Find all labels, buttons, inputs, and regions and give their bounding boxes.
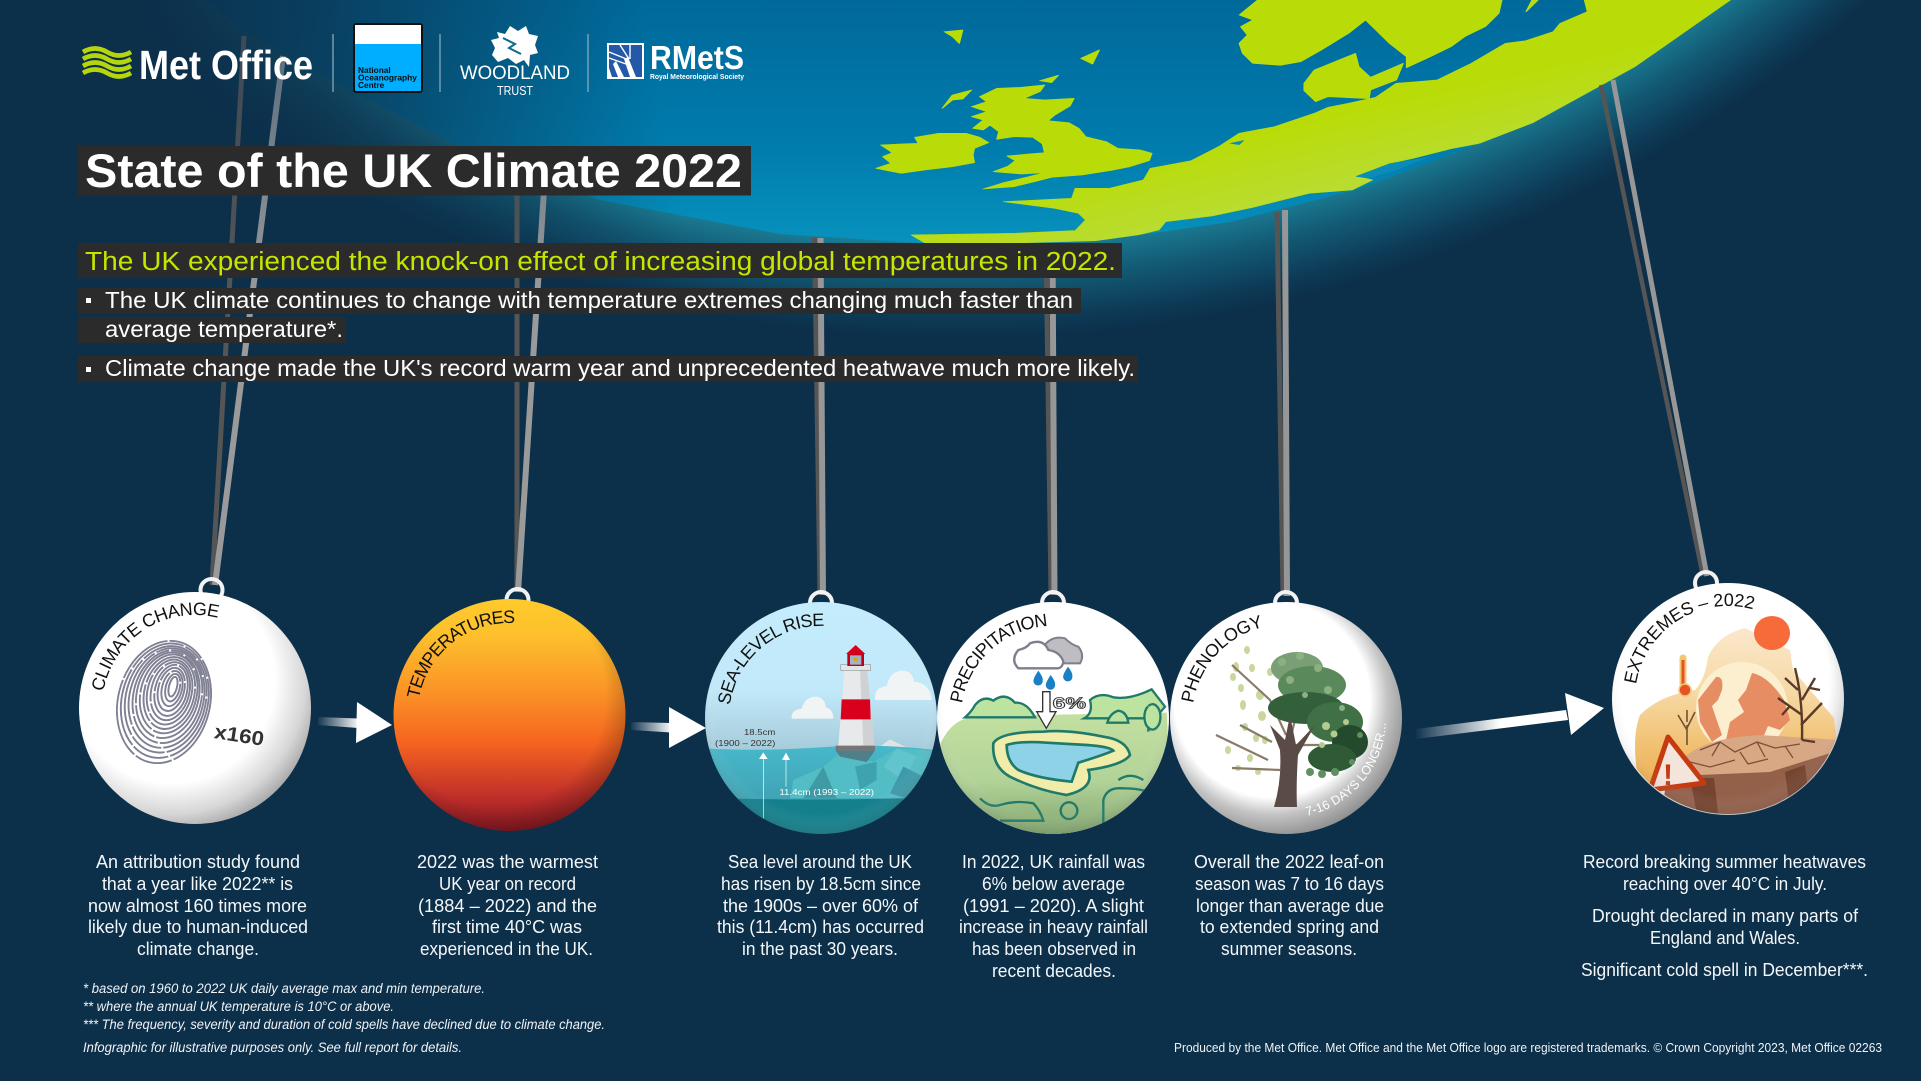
National Oceanography Centre logo: Centre (358, 80, 385, 90)
down arrow (1037, 692, 1056, 728)
distant peak (880, 740, 908, 748)
sun (1754, 616, 1790, 650)
deep water (738, 798, 904, 834)
text: extremes: Drought declared in many parts of (1592, 906, 1859, 926)
arrow: phenology to extremes (1416, 693, 1604, 739)
footnotes: ** where the annual UK temperature is 10°C or above. (83, 999, 394, 1014)
text: temperatures: (1884 – 2022) and the (418, 896, 597, 916)
bauble: extremes: ! (1663, 759, 1673, 792)
Met Office logo (83, 42, 313, 88)
icon: tree (1216, 646, 1368, 807)
National Oceanography Centre logo: National (358, 65, 391, 75)
lighthouse (836, 645, 875, 762)
icon: fingerprint (116, 640, 212, 764)
curved heading: PRECIPITATION (950, 614, 1046, 702)
Woodland Trust logo: TRUST (497, 84, 533, 98)
text: extremes (1581, 852, 1868, 980)
text: precipitation: 6% below average (982, 874, 1125, 894)
6% label: 6% (1053, 695, 1087, 712)
bullet: temperature extremes: The UK climate continues to change with temperature extremes changing much faster than (105, 287, 1073, 313)
curved label: days longer: 7-16 DAYS LONGER... (1305, 724, 1386, 816)
arrow: climate change to temperatures (318, 702, 392, 743)
title: State of the UK Climate 2022 (85, 145, 742, 198)
bauble: phenology (1170, 590, 1402, 834)
text: sea level: this (11.4cm) has occurred (717, 917, 924, 937)
ocean (195, 0, 1740, 245)
cliff (1664, 753, 1830, 814)
Woodland Trust logo: WOODLAND (460, 63, 570, 84)
text: climate change: now almost 160 times more (88, 896, 307, 916)
credit line: Produced by the Met Office. Met Office and the Met Office logo are registered trademarks. © Crown Copyright 2023, Met Office 02263 (1174, 1041, 1882, 1055)
National Oceanography Centre logo: Oceanography (358, 72, 417, 82)
text: climate change: climate change. (137, 939, 259, 959)
18.5cm label: 18.5cm (744, 727, 775, 737)
green landscape (940, 712, 1168, 834)
text: precipitation (959, 852, 1148, 981)
bullet: record warm year: Climate change made the UK's record warm year and unprecedented heatwave much more likely. (105, 355, 1135, 381)
text: temperatures: 2022 was the warmest (417, 852, 598, 872)
divider (439, 34, 441, 92)
sea (703, 746, 940, 800)
bushes (965, 689, 1165, 732)
x160 label: x160 (213, 721, 266, 751)
text: precipitation: has been observed in (972, 939, 1136, 959)
text: extremes: England and Wales. (1650, 928, 1800, 948)
sea-level arrows (759, 752, 790, 818)
divider (587, 34, 589, 92)
text: sea level (717, 852, 924, 959)
text: extremes: reaching over 40°C in July. (1623, 874, 1827, 894)
trunk (1270, 715, 1315, 807)
1900-2022 label: (1900 – 2022) (715, 738, 775, 748)
text: climate change: An attribution study found (96, 852, 300, 872)
bauble: temperatures (394, 587, 626, 831)
RMetS logo: RMetS (650, 39, 744, 76)
text: phenology: to extended spring and (1200, 917, 1379, 937)
text: phenology: season was 7 to 16 days (1195, 874, 1384, 894)
text: temperatures: first time 40°C was (432, 917, 582, 937)
curved heading: EXTREMES – 2022 (1624, 593, 1754, 683)
white cloud (1014, 642, 1063, 668)
text: sea level: in the past 30 years. (742, 939, 898, 959)
curved heading: PHENOLOGY (1181, 615, 1260, 702)
pale leaves (1225, 646, 1273, 775)
footnotes: Infographic for illustrative purposes only. See full report for details. (83, 1040, 462, 1055)
foliage (1268, 652, 1368, 778)
RMetS logo (607, 39, 745, 81)
small bare tree (1678, 710, 1695, 745)
Met Office logo: Met Office (139, 42, 313, 88)
RMetS logo: Royal Meteorological Society (650, 72, 745, 81)
text: phenology: summer seasons. (1221, 939, 1357, 959)
text: sea level: Sea level around the UK (728, 852, 912, 872)
text: temperatures: UK year on record (439, 874, 576, 894)
National Oceanography Centre logo (354, 24, 422, 92)
curved heading: CLIMATE CHANGE (92, 602, 220, 690)
arrow: temperatures to sea level (631, 707, 706, 748)
lake (993, 731, 1130, 795)
text: phenology (1194, 852, 1384, 959)
low-poly rocks (790, 748, 932, 798)
bauble: sea-level rise (705, 590, 937, 834)
bare tree (1778, 668, 1822, 742)
text: temperatures (417, 852, 598, 959)
footnotes: *** The frequency, severity and duration of cold spells have declined due to climate change. (83, 1017, 605, 1032)
curved heading: TEMPERATURES (406, 610, 514, 696)
atmosphere glow (0, 0, 1921, 340)
text: climate change (88, 852, 308, 959)
thermometer (1680, 658, 1686, 685)
footnotes (83, 981, 605, 1055)
sky (703, 600, 940, 750)
land masses (876, 0, 1751, 245)
text: climate change: likely due to human-induced (88, 917, 308, 937)
bauble: climate change (79, 577, 311, 824)
text: sea level: has risen by 18.5cm since (721, 874, 921, 894)
bullet: temperature extremes: average temperature*. (105, 316, 343, 342)
text: extremes: Significant cold spell in December***. (1581, 960, 1868, 980)
rain drops (1033, 667, 1072, 690)
bullet: temperature extremes (78, 287, 1081, 343)
text: climate change: that a year like 2022** is (102, 874, 293, 894)
text: precipitation: recent decades. (992, 961, 1116, 981)
inland and island details (1229, 140, 1430, 178)
text: extremes: Record breaking summer heatwaves (1583, 852, 1866, 872)
text: phenology: Overall the 2022 leaf-on (1194, 852, 1384, 872)
footnotes: * based on 1960 to 2022 UK daily average max and min temperature. (83, 981, 485, 996)
globe with map of Europe (208, 0, 1852, 326)
white globe (1696, 662, 1788, 743)
left fade of globe (0, 0, 800, 420)
Woodland Trust logo (460, 26, 570, 98)
warning triangle (1650, 737, 1704, 790)
white clouds (875, 671, 932, 700)
continents (1698, 673, 1790, 745)
text: precipitation: In 2022, UK rainfall was (962, 852, 1145, 872)
curved heading: SEA-LEVEL RISE (718, 614, 824, 704)
text: precipitation: increase in heavy rainfall (959, 917, 1148, 937)
text: temperatures: experienced in the UK. (420, 939, 593, 959)
branches (1216, 665, 1320, 770)
bauble: extremes (1612, 570, 1844, 815)
text: precipitation: (1991 – 2020). A slight (963, 896, 1144, 916)
11.4cm label: 11.4cm (1993 – 2022) (779, 787, 874, 797)
ropes holding the baubles (212, 36, 1707, 596)
cracked ground (1686, 735, 1836, 775)
bauble: precipitation (937, 590, 1169, 834)
text: phenology: longer than average due (1196, 896, 1384, 916)
divider (332, 34, 334, 92)
text: sea level: the 1900s – over 60% of (723, 896, 919, 916)
grey cloud (1043, 638, 1082, 663)
sand dunes backdrop (1635, 628, 1840, 790)
headline statement: The UK experienced the knock-on effect of increasing global temperatures in 2022. (85, 248, 1116, 276)
logos row (83, 24, 745, 98)
